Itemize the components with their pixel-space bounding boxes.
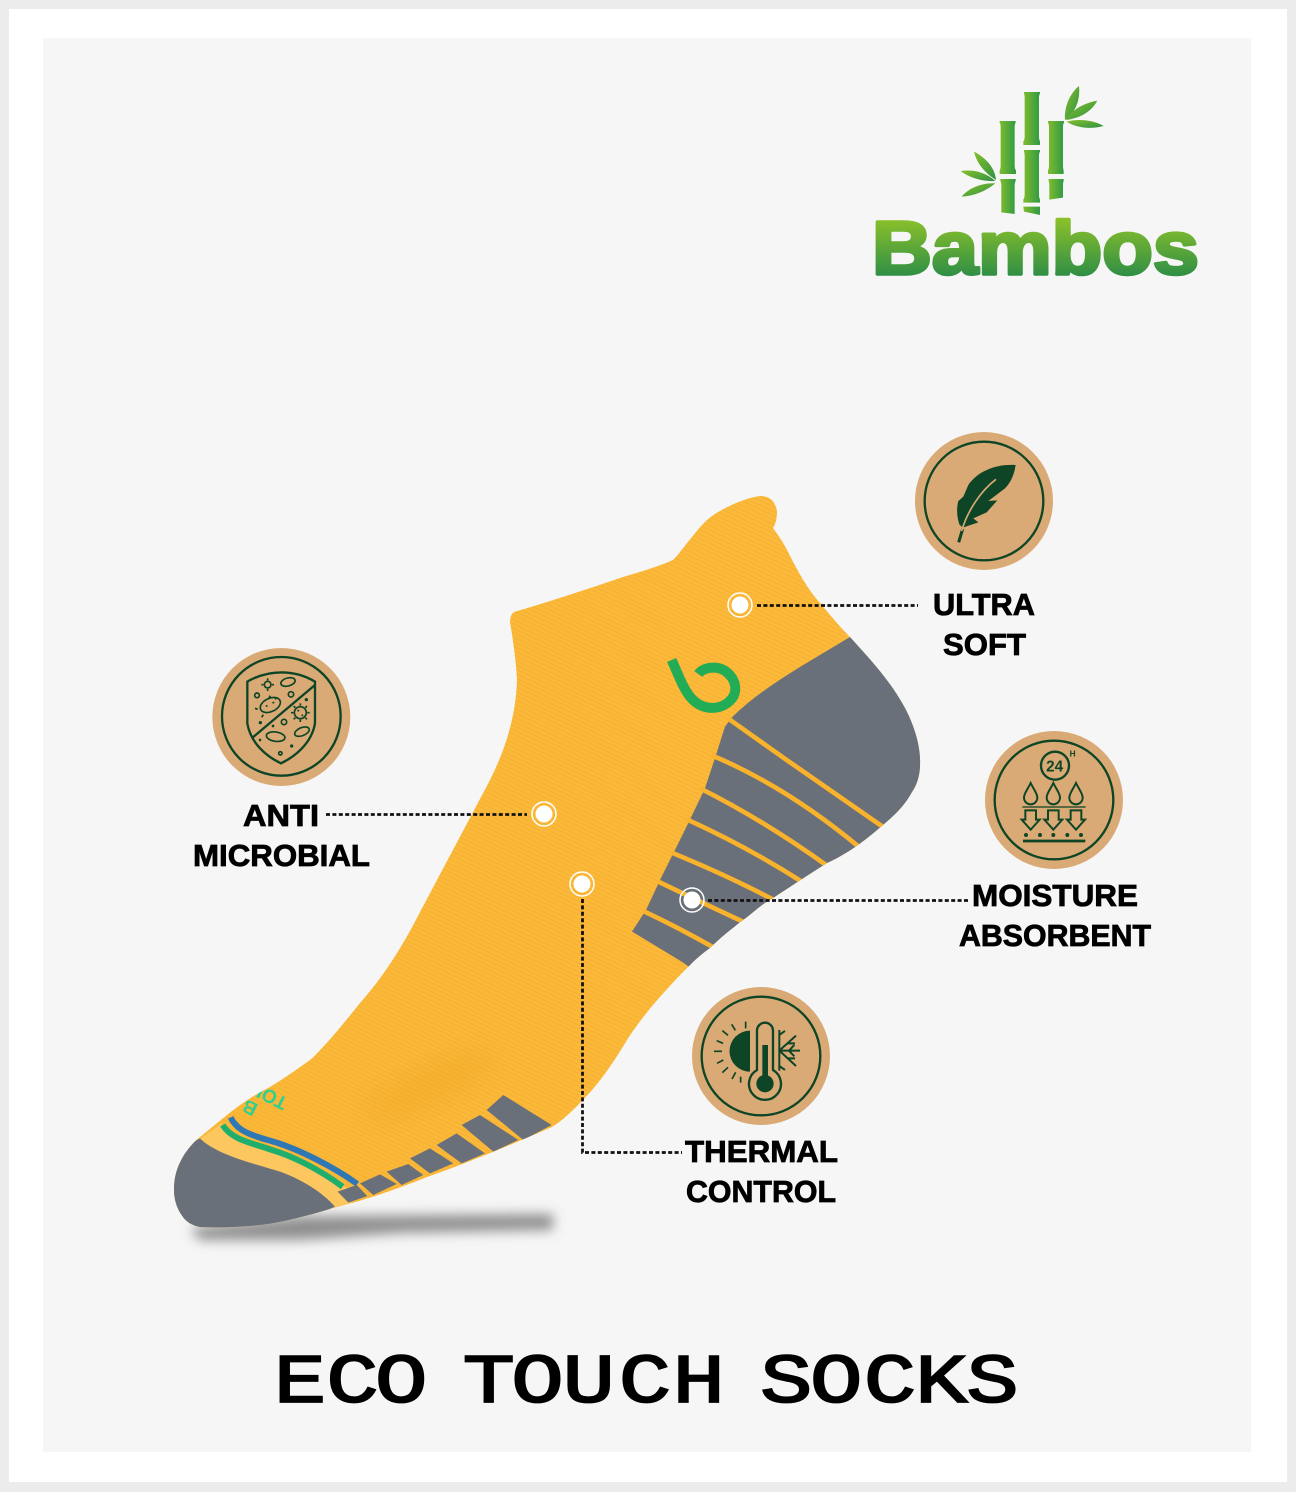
text: moisture absorbent — [959, 878, 1151, 953]
heel panel with ribbed stripes — [632, 637, 920, 966]
text: anti microbial: MICROBIAL — [193, 838, 370, 873]
text: ultra soft: ULTRA — [933, 587, 1035, 622]
icon badge: anti microbial shield — [212, 648, 350, 786]
icon: bamboo stalks and leaves — [961, 86, 1104, 215]
text: anti microbial — [193, 798, 370, 873]
text: moisture absorbent: MOISTURE — [972, 878, 1138, 913]
text: thermal control — [685, 1134, 838, 1209]
title: TOUCH — [462, 1344, 725, 1423]
brand mark b — [672, 660, 735, 708]
connector lines — [326, 606, 968, 1152]
marker: moisture absorbent — [680, 888, 704, 912]
marker: anti microbial — [532, 802, 556, 826]
worn sole shading — [392, 1065, 468, 1105]
text: ultra soft: SOFT — [943, 627, 1026, 662]
icon badge: ultra soft feather — [915, 432, 1053, 570]
icon badge: thermal control — [692, 987, 830, 1125]
text: moisture absorbent: ABSORBENT — [959, 918, 1151, 953]
text: thermal control: CONTROL — [686, 1174, 836, 1209]
sock body — [160, 480, 940, 1250]
title: ECO — [274, 1344, 428, 1423]
marker: ultra soft — [728, 593, 752, 617]
sock illustration — [160, 480, 940, 1250]
text: anti microbial: ANTI — [243, 798, 319, 833]
toe brand text: BAMBOS — [176, 1062, 261, 1119]
text: ultra soft — [933, 587, 1035, 662]
logo: Bambos — [872, 86, 1199, 290]
marker: thermal control — [570, 872, 594, 896]
text: thermal control: THERMAL — [685, 1134, 838, 1169]
toe brand text — [236, 1090, 285, 1116]
toe brand text: TOUCH — [222, 1064, 291, 1113]
knit texture — [204, 496, 848, 1202]
logo wordmark: Bambos — [872, 206, 1199, 290]
icon badge: moisture absorbent — [985, 731, 1123, 869]
icon badge: moisture absorbent: 24 — [1046, 758, 1064, 775]
title: SOCKS — [760, 1344, 1019, 1423]
icon badge: moisture absorbent: H — [1070, 748, 1076, 758]
toe band and sole stripes — [174, 1095, 552, 1228]
ground shadow — [190, 1214, 553, 1240]
